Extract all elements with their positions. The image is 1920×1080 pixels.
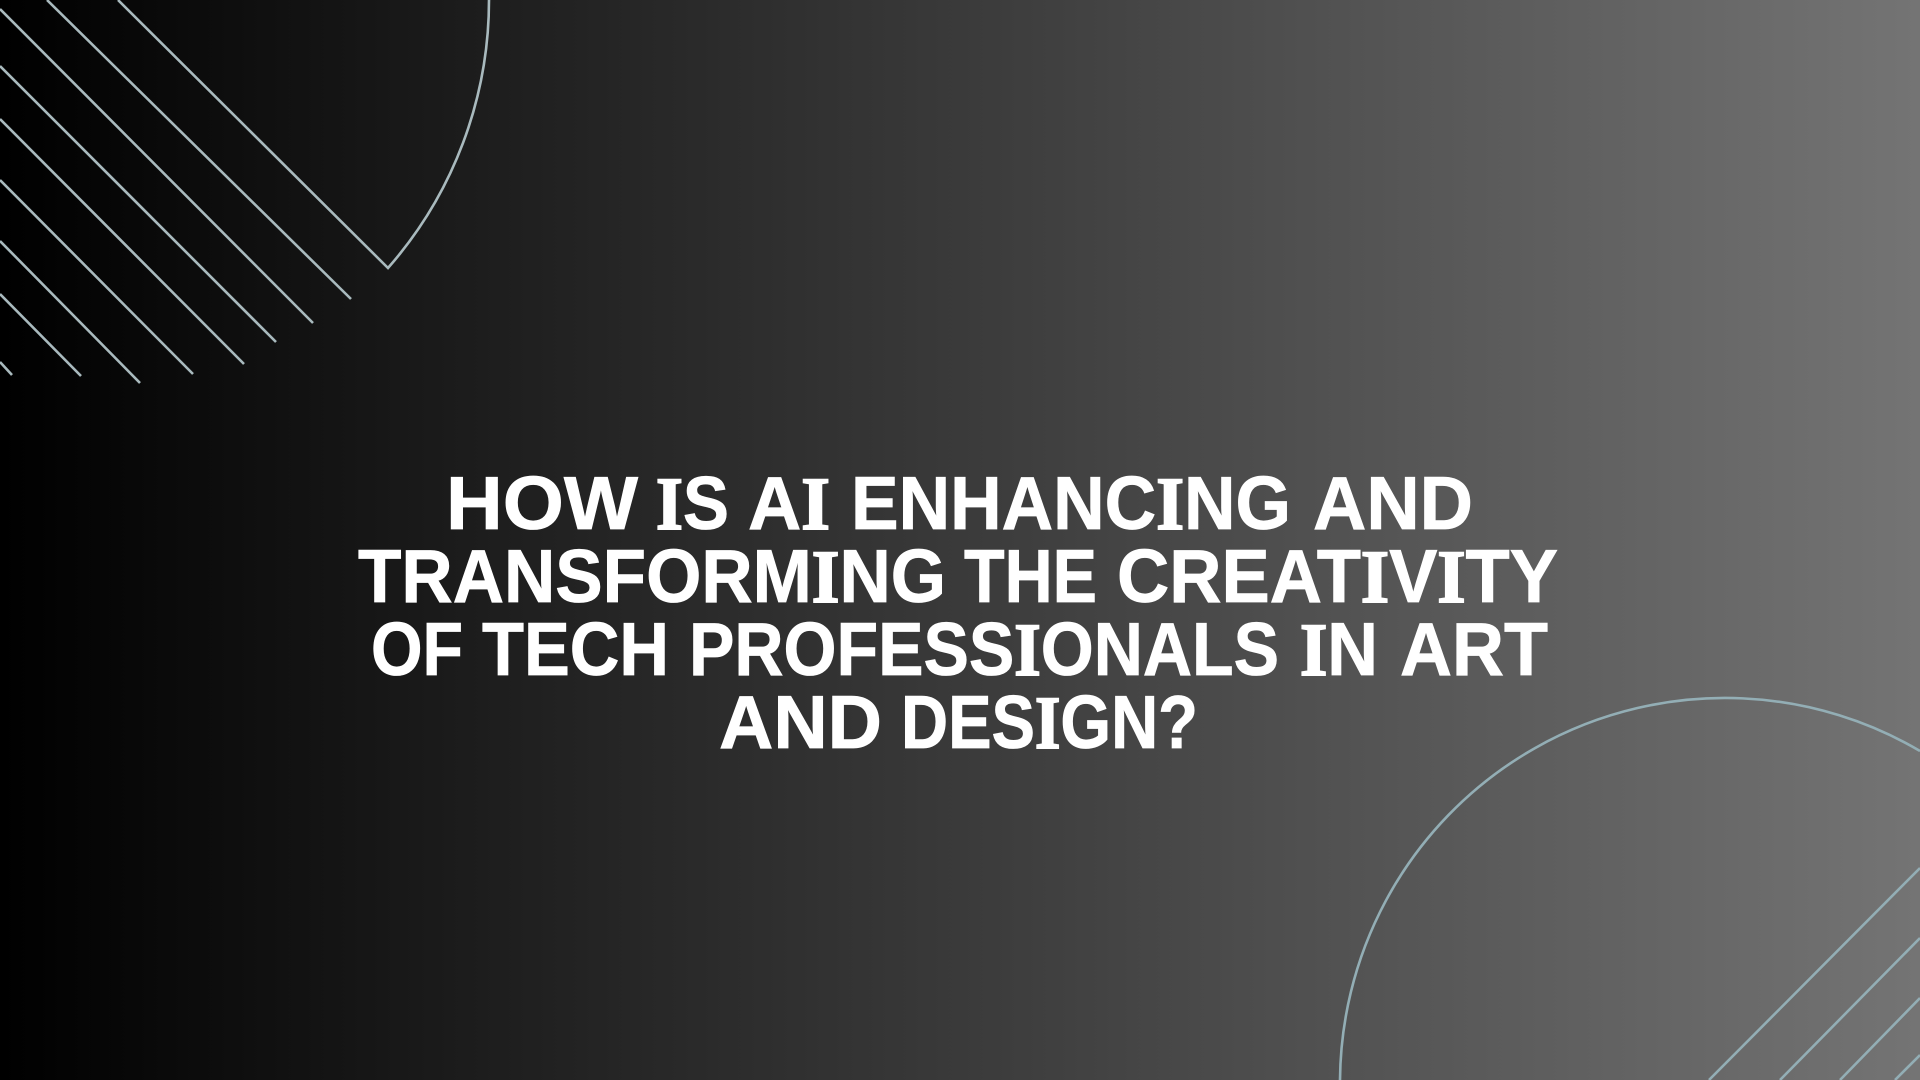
title: ART xyxy=(1400,607,1548,691)
title: PROFESSIONALS xyxy=(689,607,1279,692)
title: HOW xyxy=(446,461,638,545)
title: TECH xyxy=(482,607,669,691)
decoration: bottom-right striped circle xyxy=(1340,698,1920,1080)
title: OF xyxy=(371,607,463,691)
title: ENHANCING xyxy=(851,461,1291,546)
title xyxy=(358,461,1558,765)
decoration: top-left striped circle segment xyxy=(0,0,489,383)
title: AND xyxy=(719,680,882,764)
title: AND xyxy=(1313,461,1473,545)
title: CREATIVITY xyxy=(1117,534,1558,619)
title: THE xyxy=(964,534,1097,618)
title: DESIGN? xyxy=(901,680,1198,765)
title: IN xyxy=(1300,607,1378,692)
title: AI xyxy=(748,461,830,546)
title: TRANSFORMING xyxy=(358,534,946,619)
title: IS xyxy=(656,461,729,546)
